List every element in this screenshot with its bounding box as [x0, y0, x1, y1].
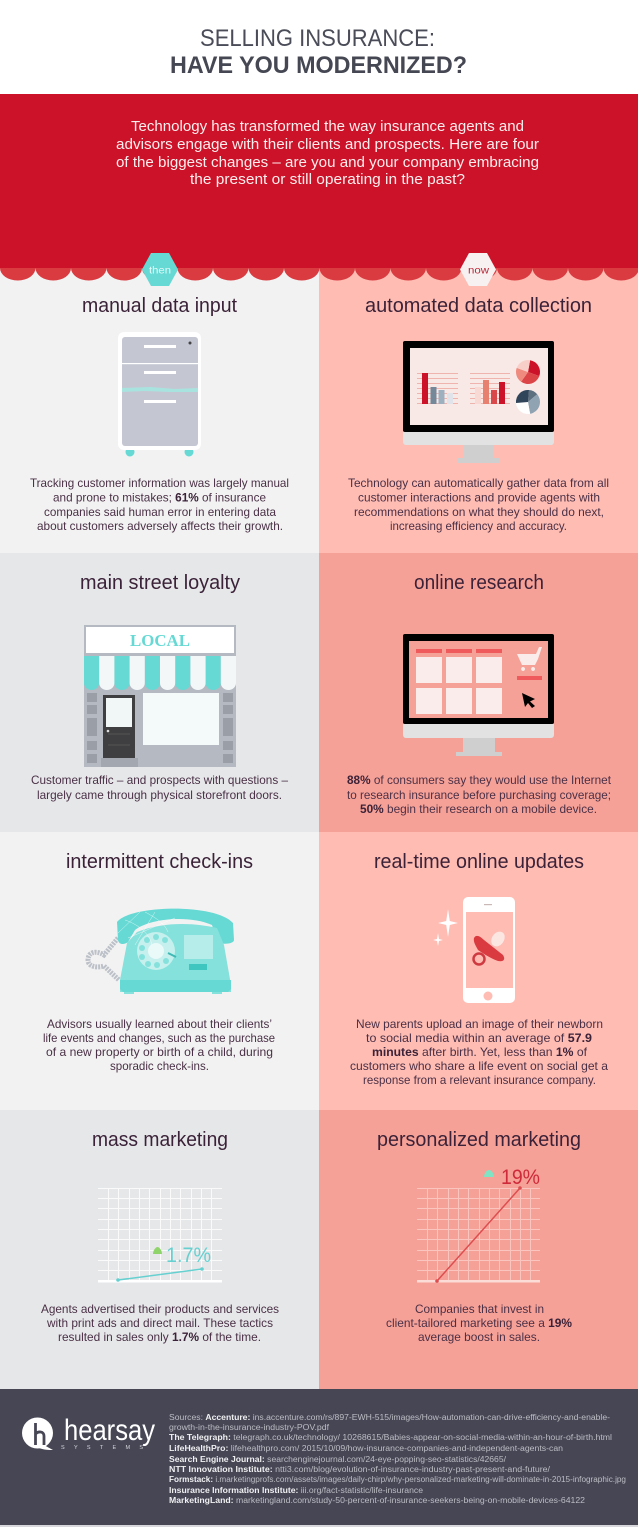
text block: manual data input: companies said human error in entering data	[44, 505, 276, 519]
panel: now, automated data collection	[319, 268, 638, 553]
sources text	[169, 1413, 626, 1505]
text block: automated data collection: customer interactions and provide agents with	[358, 490, 600, 504]
heading: real-time online updates: real-time online updates	[374, 851, 584, 873]
scalloped awning edge	[0, 268, 638, 280]
sources text: Formstack: i.marketingprofs.com/assets/images/daily-chirp/why-personalized-marketing-will-dominate-in-2015-infographic.jpg	[169, 1475, 626, 1484]
panel: then, main street loyalty	[0, 553, 319, 832]
icon: monitor with online shop	[403, 634, 554, 756]
panel: intro banner	[0, 94, 638, 286]
text block: personalized marketing	[386, 1302, 572, 1344]
panel: now, real-time online updates	[319, 832, 638, 1110]
title: HAVE YOU MODERNIZED?	[170, 52, 467, 79]
chart: 19% line: 19%	[501, 1166, 540, 1189]
logo: hearsay systems: SYSTEMS	[61, 1445, 143, 1451]
text block: automated data collection: Technology can automatically gather data from all	[348, 476, 609, 490]
text block: personalized marketing: average boost in sales.	[418, 1330, 540, 1344]
panel: then, intermittent check-ins	[0, 832, 319, 1110]
text block: main street loyalty	[31, 773, 288, 802]
sources text: Search Engine Journal: searchenginejournal.com/24-eye-popping-seo-statistics/42665/	[169, 1455, 507, 1464]
intro text: the present or still operating in the past?	[190, 171, 465, 188]
text block: personalized marketing: Companies that invest in	[415, 1302, 544, 1316]
badge: now: now	[468, 264, 489, 276]
text block: online research: 88% of consumers say they would use the Internet	[347, 773, 612, 787]
text block: intermittent check-ins: of a new property or birth of a child, during	[46, 1045, 273, 1059]
text block: manual data input: about customers adversely affects their growth.	[37, 519, 283, 533]
sources text: LifeHealthPro: lifehealthpro.com/ 2015/10/09/how-insurance-companies-and-independent-agents-can	[169, 1444, 563, 1453]
text block: real-time online updates: customers who share a life event on social get a	[350, 1059, 608, 1073]
intro text: Technology has transformed the way insurance agents and	[131, 118, 524, 135]
text block: mass marketing	[41, 1302, 279, 1344]
text block: main street loyalty: Customer traffic – and prospects with questions –	[31, 773, 288, 787]
panel: then, manual data input	[0, 268, 319, 553]
text block: intermittent check-ins: Advisors usually learned about their clients’	[47, 1017, 272, 1031]
text block: mass marketing: with print ads and direct mail. These tactics	[46, 1316, 273, 1330]
heading: manual data input: manual data input	[82, 295, 237, 317]
text block: real-time online updates: to social media within an average of 57.9	[366, 1031, 592, 1045]
text block: online research	[347, 773, 612, 816]
text block: main street loyalty: largely came through physical storefront doors.	[37, 788, 282, 802]
text block: intermittent check-ins: sporadic check-ins.	[110, 1059, 209, 1073]
icon: smartphone with pacifier	[433, 897, 515, 1003]
text block: automated data collection: increasing efficiency and accuracy.	[390, 519, 567, 533]
badge: then: then	[149, 264, 171, 276]
heading: personalized marketing: personalized marketing	[377, 1129, 581, 1151]
chart: 19% line	[417, 1166, 540, 1283]
panel: now, personalized marketing	[319, 1110, 638, 1389]
text block: automated data collection: recommendations on what they should do next,	[354, 505, 604, 519]
heading: main street loyalty: main street loyalty	[80, 572, 240, 594]
text block: manual data input: and prone to mistakes; 61% of insurance	[53, 490, 266, 504]
panel: then, mass marketing	[0, 1110, 319, 1389]
text block: manual data input	[30, 476, 289, 533]
title: SELLING INSURANCE:	[200, 25, 435, 52]
title	[170, 25, 467, 79]
sources text: NTT Innovation Institute: ntti3.com/blog/evolution-of-insurance-industry-past-present-and-future/	[169, 1465, 551, 1474]
intro text	[116, 118, 539, 188]
heading: mass marketing: mass marketing	[92, 1129, 228, 1151]
sources text: growth-in-the-insurance-industry-POV.pdf	[169, 1423, 330, 1432]
panel: footer	[0, 1389, 638, 1527]
icon: local storefront	[84, 625, 236, 767]
sources text: The Telegraph: telegraph.co.uk/technology/ 10268615/Babies-appear-on-social-media-within-an-hour-of-birth.html	[169, 1433, 612, 1442]
logo: hearsay systems: hearsay	[64, 1414, 155, 1447]
text block: manual data input: Tracking customer information was largely manual	[30, 476, 289, 490]
text block: real-time online updates: New parents upload an image of their newborn	[356, 1017, 603, 1031]
heading: online research: online research	[414, 572, 544, 594]
text block: real-time online updates: response from a relevant insurance company.	[363, 1073, 596, 1087]
text block: real-time online updates: minutes after birth. Yet, less than 1% of	[372, 1045, 588, 1059]
text block: mass marketing: resulted in sales only 1.7% of the time.	[58, 1330, 261, 1344]
text block: online research: to research insurance before purchasing coverage;	[347, 788, 611, 802]
icon: rotary telephone	[88, 909, 234, 994]
chart: 1.7% line: 1.7%	[166, 1244, 211, 1267]
logo: hearsay systems	[22, 1414, 155, 1451]
text block: real-time online updates	[350, 1017, 608, 1087]
intro text: of the biggest changes – are you and your company embracing	[116, 154, 539, 171]
text block: mass marketing: Agents advertised their products and services	[41, 1302, 279, 1316]
icon: filing cabinet	[118, 332, 201, 456]
text block: intermittent check-ins: life events and changes, such as the purchase	[43, 1031, 275, 1045]
text block: automated data collection	[348, 476, 609, 533]
badge: now	[460, 253, 496, 286]
icon: local storefront: LOCAL	[130, 631, 190, 650]
text block: online research: 50% begin their research on a mobile device.	[360, 802, 597, 816]
chart: 1.7% line	[98, 1188, 222, 1282]
sources text: MarketingLand: marketingland.com/study-50-percent-of-insurance-seekers-being-on-mobile-devices-64122	[169, 1496, 586, 1505]
text block: intermittent check-ins	[43, 1017, 275, 1073]
sources text: Sources: Accenture: ins.accenture.com/rs/897-EWH-515/images/How-automation-can-drive-efficiency-and-enable-	[169, 1413, 610, 1422]
text block: personalized marketing: client-tailored marketing see a 19%	[386, 1316, 572, 1330]
intro text: advisors engage with their clients and prospects. Here are four	[116, 136, 539, 153]
sources text: Insurance Information Institute: iii.org/fact-statistic/life-insurance	[169, 1486, 424, 1495]
heading: intermittent check-ins: intermittent check-ins	[66, 851, 253, 873]
icon: monitor with charts	[403, 341, 554, 463]
badge: then	[142, 253, 178, 286]
panel: now, online research	[319, 553, 638, 832]
heading: automated data collection: automated data collection	[365, 295, 592, 317]
